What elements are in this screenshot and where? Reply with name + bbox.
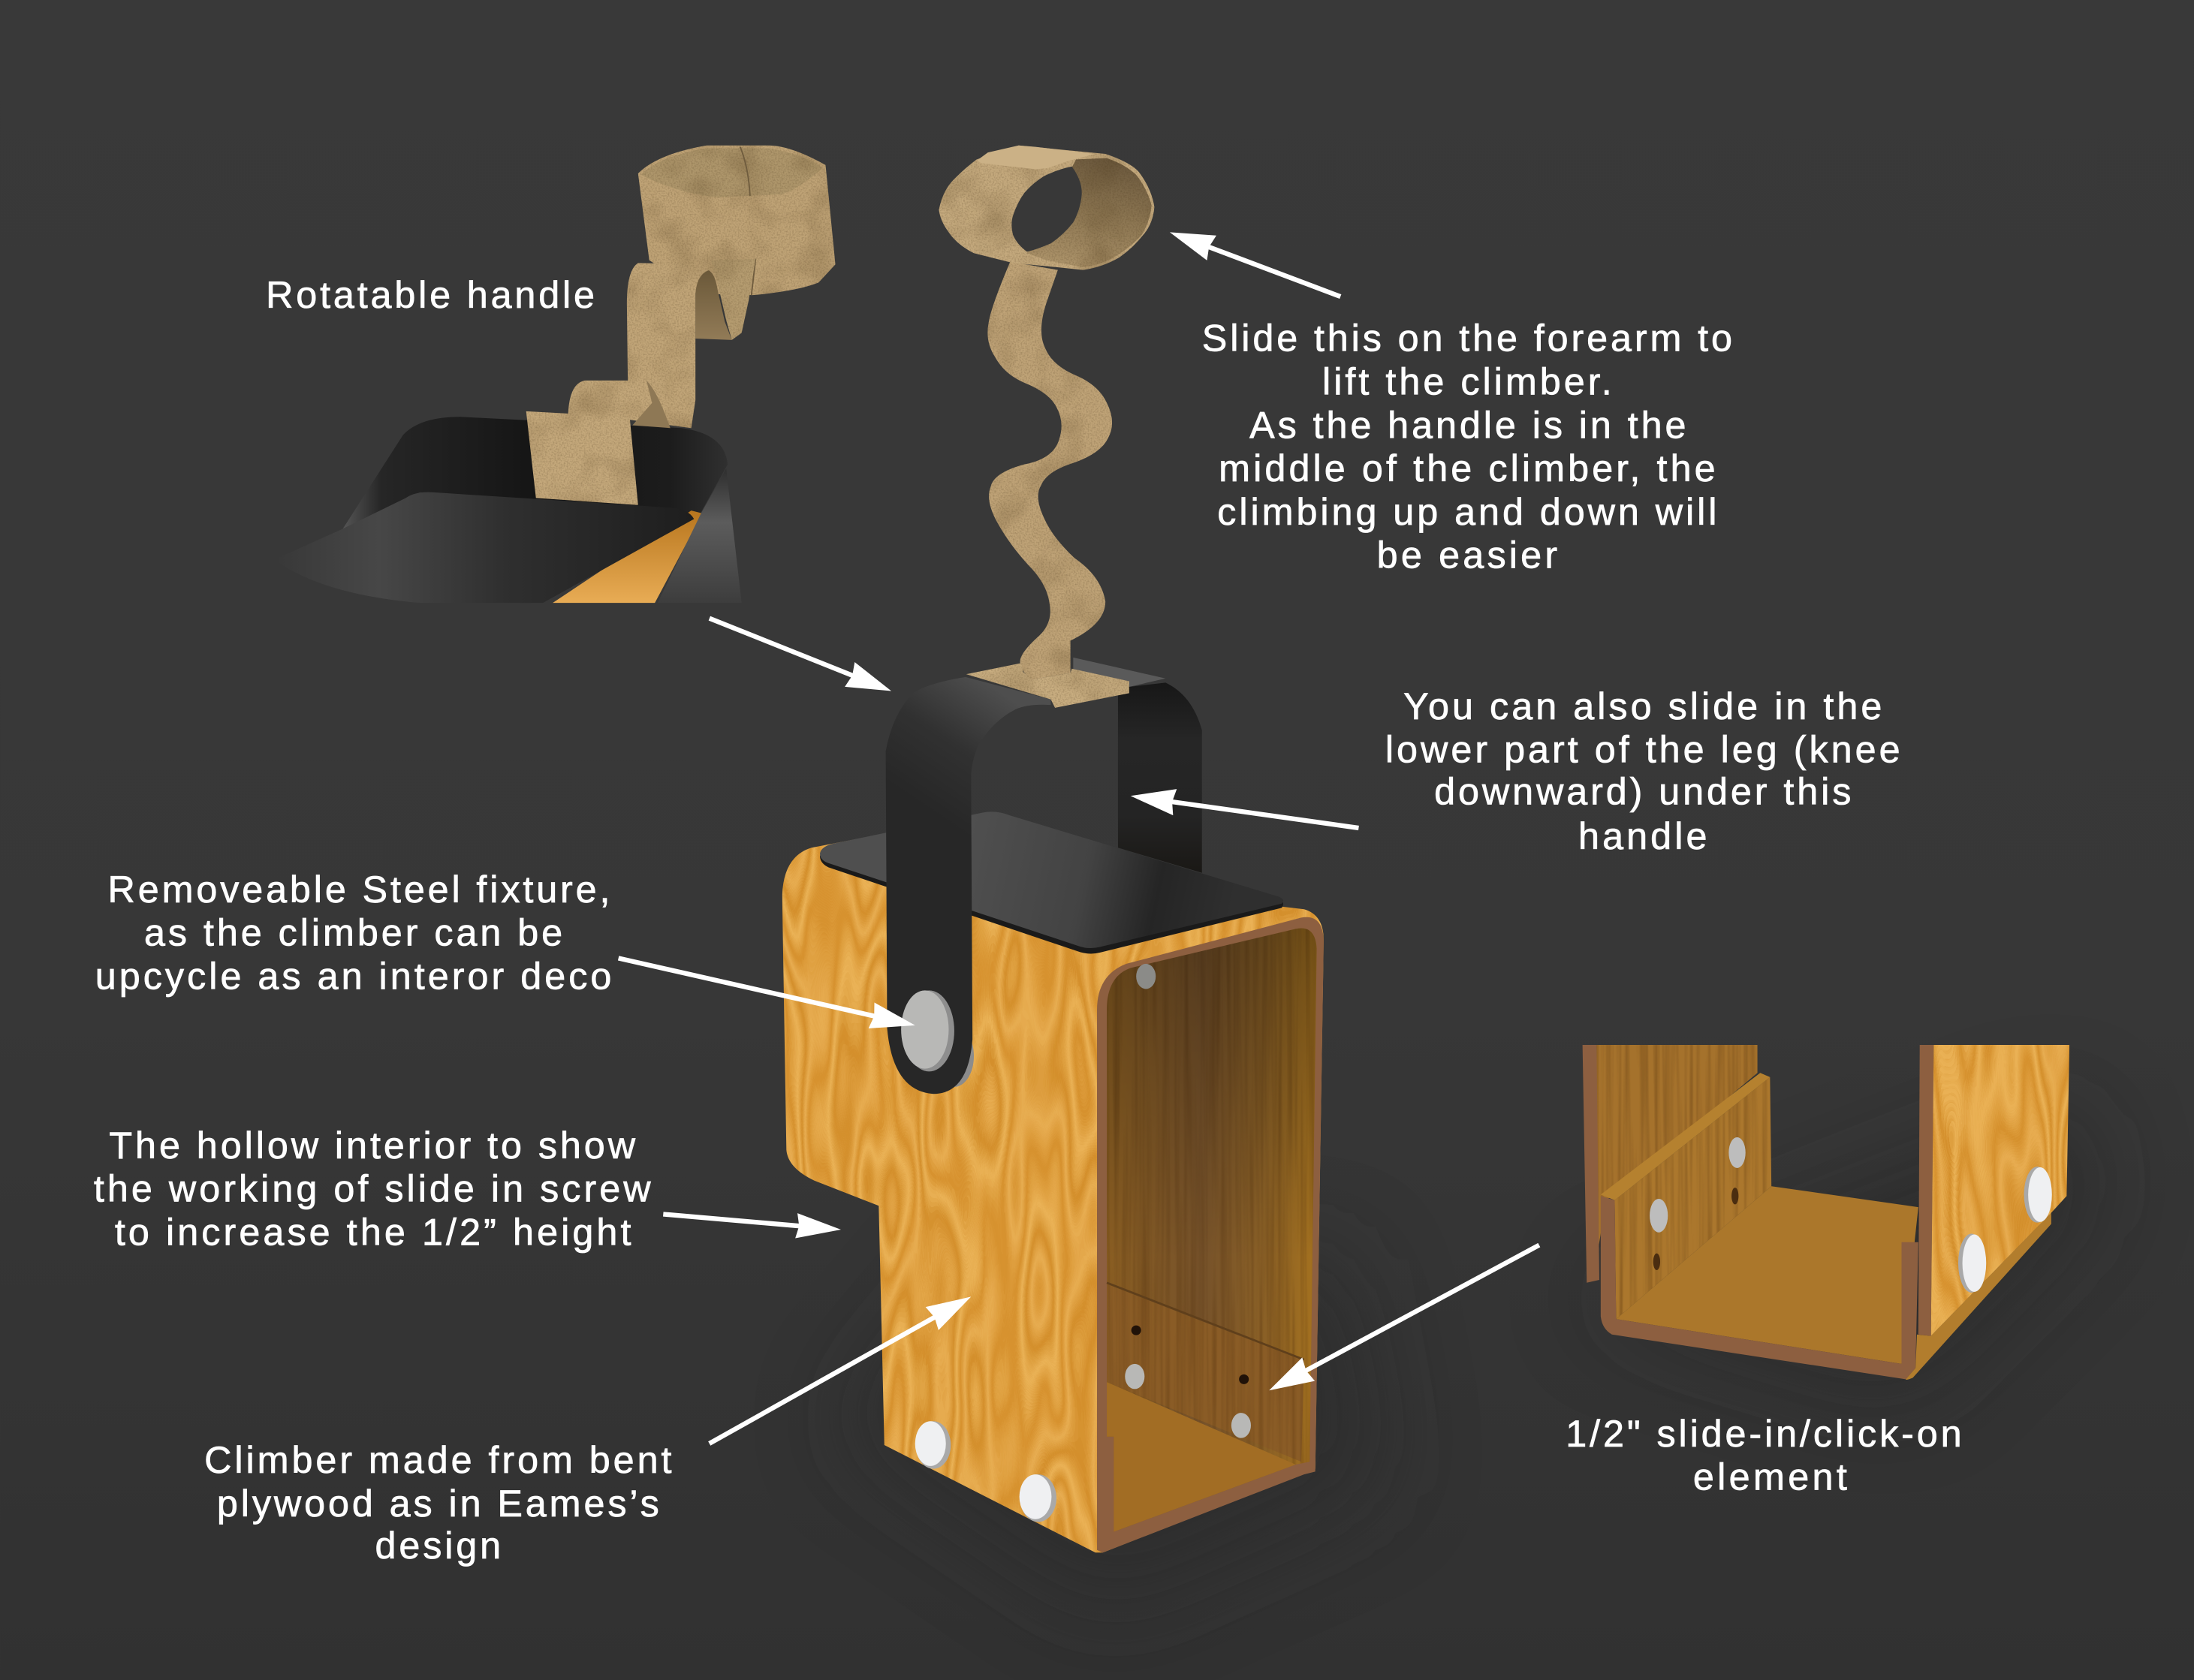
rear wall <box>1596 1045 1758 1259</box>
arrow: to lower leg handle <box>1129 783 1361 842</box>
label: slide-in element: element <box>1693 1456 1847 1498</box>
cylinder slit <box>740 147 755 295</box>
label: slide on forearm: Slide this on the forearm to <box>1202 317 1732 360</box>
climber body <box>782 839 1324 1552</box>
label: hollow interior <box>94 1124 651 1253</box>
label: lower leg: lower part of the leg (knee <box>1385 728 1900 771</box>
inset strap side <box>658 468 742 603</box>
label: lower leg <box>1385 685 1900 857</box>
rear strap leg <box>1118 682 1202 873</box>
steel fixture <box>820 658 1283 1094</box>
strap fold interior <box>695 270 732 340</box>
floor shadow under slide-in element <box>1581 1105 2099 1398</box>
U shaped rim <box>1601 1196 1918 1379</box>
underside <box>1906 1213 2051 1380</box>
insert flange <box>1601 1073 1770 1200</box>
label: hollow interior: to increase the 1/2” height <box>115 1210 631 1253</box>
label: bent plywood: plywood as in Eames’s <box>217 1482 659 1525</box>
white pegs <box>1958 1167 2052 1293</box>
insert wall <box>1614 1077 1771 1319</box>
label: slide-in element: 1/2" slide-in/click-on <box>1566 1412 1962 1455</box>
felt base tab <box>966 663 1129 708</box>
cylinder band of the handle <box>638 146 836 295</box>
label: bent plywood: Climber made from bent <box>204 1438 672 1481</box>
arrow: to strap top <box>704 606 897 703</box>
label: steel fixture: Removeable Steel fixture, <box>108 868 610 911</box>
inset steel plate <box>274 492 694 603</box>
looped felt strap upper <box>627 263 710 428</box>
wavy felt ribbon <box>987 261 1112 680</box>
arrow: to hollow cut-out <box>662 1202 842 1242</box>
label: bent plywood: design <box>375 1524 501 1567</box>
felt ring inner surface <box>1027 158 1152 267</box>
label: lower leg: downward) under this <box>1434 769 1851 812</box>
felt handle <box>939 146 1154 708</box>
label: slide on forearm: As the handle is in the <box>1249 403 1686 446</box>
felt strap shaded gap <box>632 381 671 428</box>
label: hollow interior: The hollow interior to show <box>109 1124 636 1167</box>
floor shadow under climber <box>839 1259 1385 1609</box>
felt ring outer band <box>939 146 1154 270</box>
front felt tab <box>526 411 638 505</box>
label: slide on forearm: lift the climber. <box>1322 360 1612 402</box>
interior upper screw <box>1136 964 1156 989</box>
label: slide on forearm: middle of the climber, the <box>1219 447 1716 489</box>
label: lower leg: handle <box>1578 814 1707 857</box>
steel bolt <box>901 990 954 1071</box>
right wood face <box>1931 1045 2069 1336</box>
looped felt strap lower <box>568 381 671 428</box>
label: slide-in element <box>1566 1412 1962 1498</box>
plywood rim <box>1097 917 1324 1552</box>
hollow interior <box>1107 928 1317 1531</box>
felt ring tab <box>978 146 1094 169</box>
left rim <box>1583 1045 1599 1283</box>
label: steel fixture: as the climber can be <box>144 911 562 954</box>
interior slide-in wall <box>1107 1284 1304 1462</box>
bolt peek under strap <box>935 1025 974 1087</box>
slide-in click-on element <box>1583 1035 2085 1380</box>
label: lower leg: You can also slide in the <box>1403 685 1882 727</box>
interior wall flange edge <box>1107 1283 1304 1359</box>
inset wood <box>553 510 703 603</box>
interior holes and screws <box>1125 1326 1251 1438</box>
plywood wood surface <box>782 839 1324 1552</box>
label: steel fixture: upcycle as an interor deco <box>95 954 611 997</box>
floor <box>1616 1186 1918 1364</box>
arrow: to steel bolt <box>616 945 918 1038</box>
interior floor <box>1107 1382 1296 1531</box>
right rim <box>1918 1045 1933 1336</box>
white peg left <box>915 1421 951 1469</box>
label: hollow interior: the working of slide in screw <box>94 1167 651 1210</box>
strap fold tail <box>711 259 755 340</box>
white peg right <box>1020 1474 1056 1522</box>
grey screws and holes <box>1650 1137 1746 1270</box>
steel top plate <box>820 813 1283 953</box>
steel plate face <box>820 811 1283 948</box>
front strap arch and leg <box>886 677 1051 1094</box>
label: steel fixture <box>95 868 611 997</box>
label: bent plywood <box>204 1438 672 1567</box>
rotatable handle inset <box>274 146 836 603</box>
label: slide on forearm <box>1202 317 1732 577</box>
cylinder interior <box>641 149 823 197</box>
label: slide on forearm: climbing up and down will <box>1217 490 1717 533</box>
felt ring opening <box>1011 167 1082 251</box>
arrow: to plywood face <box>703 1285 978 1455</box>
arrow: from slide-in element <box>1263 1233 1545 1402</box>
arrow: to forearm ring <box>1165 220 1346 309</box>
label: rotatable handle: Rotatable handle <box>266 273 595 316</box>
inset black strap <box>343 417 728 528</box>
rear grey strap top <box>1073 658 1165 687</box>
label: slide on forearm: be easier <box>1377 534 1557 577</box>
